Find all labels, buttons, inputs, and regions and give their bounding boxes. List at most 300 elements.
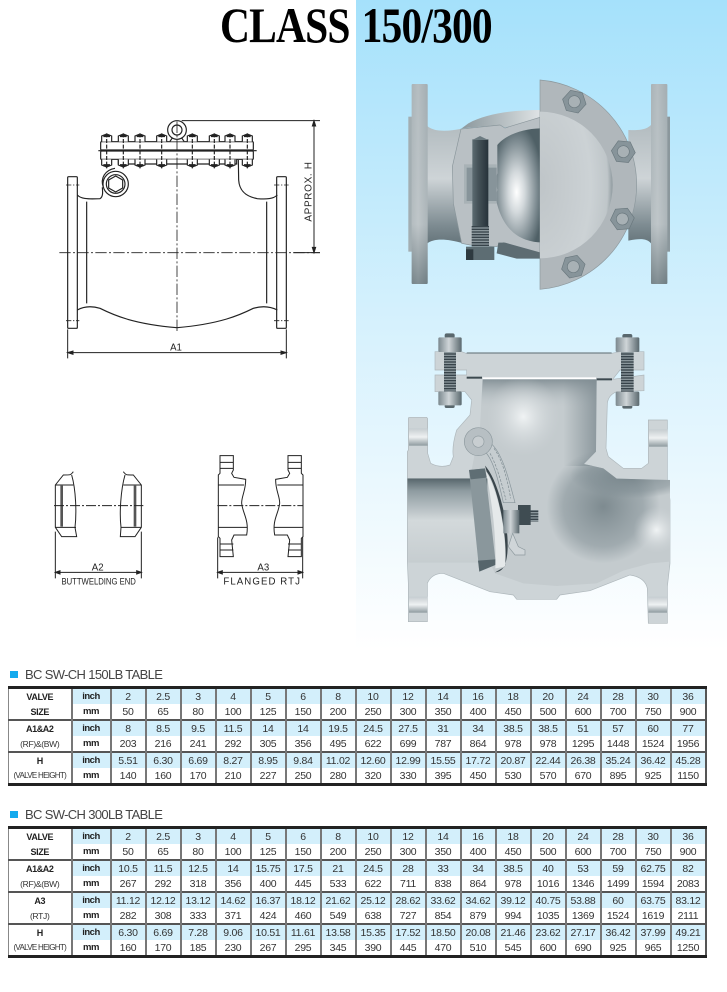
table: 300LB dimensions: 1250 bbox=[677, 942, 699, 954]
A3 dimension bbox=[218, 537, 303, 588]
table: 150LB dimensions: 26.38 bbox=[570, 754, 596, 766]
table: 300LB dimensions: 20 bbox=[542, 830, 554, 842]
table: 300LB dimensions: 345 bbox=[330, 942, 346, 954]
table: 300LB dimensions: 40.75 bbox=[535, 894, 561, 906]
table: 150LB dimensions: 9.84 bbox=[293, 754, 313, 766]
table: 150LB dimensions: 622 bbox=[365, 738, 381, 750]
table: 300LB dimensions: 36.42 bbox=[605, 926, 631, 938]
table: 150LB dimensions: 10 bbox=[367, 690, 379, 702]
illustration: valve end cutaway bbox=[408, 80, 670, 289]
table: 300LB dimensions: 2.5 bbox=[156, 830, 170, 842]
table: 300LB dimensions: 28 bbox=[402, 862, 414, 874]
table: 300LB dimensions: 63.75 bbox=[640, 894, 666, 906]
table: 300LB dimensions: 7.28 bbox=[188, 926, 208, 938]
table: 150LB dimensions: 24.5 bbox=[363, 722, 383, 734]
table: 300LB dimensions: 15.75 bbox=[255, 862, 281, 874]
table: 300LB dimensions: mm bbox=[83, 910, 99, 920]
table: 150LB dimensions: mm bbox=[83, 706, 99, 716]
table: 150LB dimensions: inch bbox=[82, 722, 100, 734]
icon: blue square bullet 150LB bbox=[10, 671, 18, 678]
table: 300LB dimensions: 200 bbox=[330, 846, 346, 858]
table: 150LB dimensions: 305 bbox=[260, 738, 276, 750]
table: 300LB dimensions: inch bbox=[82, 830, 100, 842]
table: 300LB dimensions: 12 bbox=[402, 830, 414, 842]
dimension: A1: A1 bbox=[170, 343, 182, 354]
table: 300LB dimensions: 82 bbox=[682, 862, 694, 874]
A2 dimension bbox=[55, 532, 141, 587]
table: 300LB dimensions: 30 bbox=[647, 830, 659, 842]
table: 300LB dimensions: 17.52 bbox=[395, 926, 421, 938]
table: 150LB dimensions: (VALVE HEIGHT) bbox=[13, 770, 66, 780]
table: 150LB dimensions: 11.5 bbox=[224, 722, 242, 734]
table: 150LB dimensions: 227 bbox=[260, 770, 276, 782]
table: 300LB dimensions: 170 bbox=[155, 942, 171, 954]
table: 150LB dimensions: 35.24 bbox=[605, 754, 631, 766]
table: 300LB dimensions: 400 bbox=[260, 878, 276, 890]
table: 300LB dimensions: SIZE bbox=[31, 846, 49, 856]
table: 300LB dimensions: 5 bbox=[265, 830, 271, 842]
table: 300LB dimensions: 40 bbox=[542, 862, 554, 874]
table: 150LB dimensions: 51 bbox=[577, 722, 589, 734]
table: 150LB dimensions: 216 bbox=[155, 738, 171, 750]
table: 150LB dimensions: 77 bbox=[682, 722, 694, 734]
table: 300LB dimensions: 854 bbox=[435, 910, 451, 922]
table: 300LB dimensions: 100 bbox=[225, 846, 241, 858]
table: 300LB dimensions: 6.69 bbox=[153, 926, 173, 938]
table: 300LB dimensions: 11.61 bbox=[291, 926, 315, 938]
table: 300LB dimensions: 50 bbox=[122, 846, 134, 858]
table: 300LB dimensions: 445 bbox=[295, 878, 311, 890]
table: 300LB dimensions: 1369 bbox=[572, 910, 594, 922]
table: 300LB dimensions: 53 bbox=[577, 862, 589, 874]
table: 150LB dimensions: 150 bbox=[295, 706, 311, 718]
table: 150LB dimensions: 9.5 bbox=[191, 722, 205, 734]
table: 300LB dimensions: 13.12 bbox=[185, 894, 211, 906]
table: 150LB dimensions: 3 bbox=[195, 690, 201, 702]
table: 150LB dimensions: 160 bbox=[155, 770, 171, 782]
table: 300LB dimensions: 11.5 bbox=[154, 862, 172, 874]
cut body section bbox=[452, 110, 540, 259]
table: 300LB dimensions: 62.75 bbox=[640, 862, 666, 874]
table: 150LB dimensions: 900 bbox=[680, 706, 696, 718]
table: 300LB dimensions: 16.37 bbox=[255, 894, 281, 906]
table: 150LB dimensions: 2.5 bbox=[156, 690, 170, 702]
table: 150LB dimensions: 6 bbox=[300, 690, 306, 702]
table: 150LB dimensions: 38.5 bbox=[538, 722, 558, 734]
gasket and cover lines bbox=[467, 352, 612, 380]
table: 300LB dimensions: (RF)&(BW) bbox=[20, 878, 59, 888]
table: 150LB dimensions bbox=[8, 686, 706, 786]
table: 300LB dimensions: 510 bbox=[470, 942, 486, 954]
table: 300LB dimensions: 36 bbox=[682, 830, 694, 842]
table: 150LB dimensions: 570 bbox=[540, 770, 556, 782]
table: 150LB dimensions: 699 bbox=[400, 738, 416, 750]
table: 300LB dimensions: 350 bbox=[435, 846, 451, 858]
table: 150LB dimensions: 18 bbox=[507, 690, 519, 702]
table: 150LB dimensions: 14 bbox=[437, 690, 449, 702]
cover bolts bbox=[98, 133, 257, 168]
A2 dimension: BUTTWELDING END bbox=[61, 577, 136, 587]
table: 150LB dimensions: 125 bbox=[260, 706, 276, 718]
table: 150LB dimensions: 65 bbox=[157, 706, 169, 718]
table: 300LB dimensions: 295 bbox=[295, 942, 311, 954]
table: 300LB dimensions: 14 bbox=[437, 830, 449, 842]
table: 150LB dimensions: 15.55 bbox=[430, 754, 456, 766]
table: 150LB dimensions: 28 bbox=[612, 690, 624, 702]
table: 300LB dimensions: 60 bbox=[612, 894, 624, 906]
disc seen edge on bbox=[464, 164, 497, 204]
table: 300LB dimensions: 1594 bbox=[642, 878, 664, 890]
flanges bbox=[408, 84, 670, 284]
A3 dimension: FLANGED RTJ bbox=[223, 577, 300, 588]
table: 300LB dimensions: 33.62 bbox=[430, 894, 456, 906]
table: 300LB dimensions: 16 bbox=[472, 830, 484, 842]
table: 150LB dimensions: 34 bbox=[472, 722, 484, 734]
table: 300LB dimensions: 8 bbox=[335, 830, 341, 842]
illustration: valve longitudinal section bbox=[407, 333, 697, 623]
table: 150LB dimensions: 8.5 bbox=[156, 722, 170, 734]
table: 150LB dimensions: 400 bbox=[470, 706, 486, 718]
table: 150LB dimensions: 8.95 bbox=[258, 754, 278, 766]
table: 150LB dimensions: 864 bbox=[470, 738, 486, 750]
table: 150LB dimensions: 356 bbox=[295, 738, 311, 750]
table: 300LB dimensions: 638 bbox=[365, 910, 381, 922]
table: 150LB dimensions: A1&A2 bbox=[26, 724, 54, 734]
table: 300LB dimensions: 1016 bbox=[537, 878, 559, 890]
table: 150LB dimensions: 750 bbox=[645, 706, 661, 718]
panel: blue gradient background bbox=[356, 0, 727, 650]
table: 300LB dimensions: 33 bbox=[437, 862, 449, 874]
table: 300LB dimensions: mm bbox=[83, 878, 99, 888]
table: 300LB dimensions: 12.12 bbox=[150, 894, 176, 906]
table: 300LB dimensions: 250 bbox=[365, 846, 381, 858]
table: 150LB dimensions: 6.30 bbox=[153, 754, 173, 766]
swing disc bbox=[469, 466, 508, 572]
table: 300LB dimensions: inch bbox=[82, 926, 100, 938]
table: 150LB dimensions: 17.72 bbox=[465, 754, 491, 766]
table: 300LB dimensions: 39.12 bbox=[500, 894, 526, 906]
table: 300LB dimensions: 80 bbox=[192, 846, 204, 858]
table: 300LB dimensions: 185 bbox=[190, 942, 206, 954]
body necks bbox=[427, 125, 651, 243]
table: 300LB dimensions: 424 bbox=[260, 910, 276, 922]
table: 300LB dimensions: 27.17 bbox=[570, 926, 596, 938]
table: 300LB dimensions: 445 bbox=[400, 942, 416, 954]
table: 300LB dimensions: 13.58 bbox=[325, 926, 351, 938]
table: 150LB dimensions: 31 bbox=[437, 722, 449, 734]
table: 150LB dimensions: 170 bbox=[190, 770, 206, 782]
table: 300LB dimensions: 12.5 bbox=[188, 862, 208, 874]
table: 300LB dimensions: 18.12 bbox=[290, 894, 316, 906]
table: 300LB dimensions: 83.12 bbox=[675, 894, 701, 906]
table: 150LB dimensions: 8.27 bbox=[223, 754, 243, 766]
table: 300LB dimensions: 1619 bbox=[642, 910, 664, 922]
table: 150LB dimensions: 1448 bbox=[607, 738, 629, 750]
table: 150LB dimensions: 200 bbox=[330, 706, 346, 718]
table: 300LB dimensions: 925 bbox=[610, 942, 626, 954]
table: 300LB dimensions: 292 bbox=[155, 878, 171, 890]
table: 300LB dimensions: mm bbox=[83, 846, 99, 856]
table: 150LB dimensions: 60 bbox=[647, 722, 659, 734]
table: 300LB dimensions: 1035 bbox=[537, 910, 559, 922]
table: 300LB dimensions: 21.46 bbox=[500, 926, 526, 938]
table: 300LB dimensions: 38.5 bbox=[503, 862, 523, 874]
table: 300LB dimensions: 10.51 bbox=[255, 926, 281, 938]
table: 150LB dimensions: 30 bbox=[647, 690, 659, 702]
table: 300LB dimensions: 371 bbox=[225, 910, 241, 922]
table: 300LB dimensions: 2 bbox=[125, 830, 131, 842]
table: 150LB dimensions: 895 bbox=[610, 770, 626, 782]
table: 150LB dimensions: 8 bbox=[335, 690, 341, 702]
table: 300LB dimensions: (VALVE HEIGHT) bbox=[13, 942, 66, 952]
table: 150LB dimensions: 320 bbox=[365, 770, 381, 782]
table: 150LB dimensions: inch bbox=[82, 754, 100, 766]
table: 150LB dimensions: mm bbox=[83, 770, 99, 780]
table: 150LB dimensions: 45.28 bbox=[675, 754, 701, 766]
table: 300LB dimensions: 28 bbox=[612, 830, 624, 842]
table: 150LB dimensions: (RF)&(BW) bbox=[20, 738, 59, 748]
long stud bolt bbox=[466, 136, 494, 260]
table: 300LB dimensions: A3 bbox=[34, 896, 45, 906]
hinge pin bbox=[464, 428, 492, 456]
table: 300LB dimensions: 34 bbox=[472, 862, 484, 874]
table: 300LB dimensions: 994 bbox=[505, 910, 521, 922]
A3 dimension: A3 bbox=[257, 562, 269, 573]
inner cavity bbox=[495, 128, 540, 242]
table: 150LB dimensions: 395 bbox=[435, 770, 451, 782]
table: 150LB dimensions: 2 bbox=[125, 690, 131, 702]
table: 150LB dimensions: 36 bbox=[682, 690, 694, 702]
table: 300LB dimensions: 20.08 bbox=[465, 926, 491, 938]
table: 150LB dimensions: 250 bbox=[365, 706, 381, 718]
table: 150LB dimensions: SIZE bbox=[31, 706, 49, 716]
table: 300LB dimensions: 160 bbox=[120, 942, 136, 954]
table: 150LB dimensions: 14 bbox=[262, 722, 274, 734]
right cover bolt bbox=[616, 334, 639, 409]
table: 300LB dimensions: 21 bbox=[332, 862, 344, 874]
table: 300LB dimensions: 600 bbox=[540, 942, 556, 954]
body section silhouette bbox=[407, 352, 670, 623]
table: 300LB dimensions: 978 bbox=[505, 878, 521, 890]
table: 150LB dimensions: 80 bbox=[192, 706, 204, 718]
swing arm bbox=[485, 443, 515, 503]
table: 300LB dimensions: 282 bbox=[120, 910, 136, 922]
table: 150LB dimensions: inch bbox=[82, 690, 100, 702]
table: 150LB dimensions: 292 bbox=[225, 738, 241, 750]
table: 150LB dimensions: 50 bbox=[122, 706, 134, 718]
table: 300LB dimensions: 14.62 bbox=[220, 894, 246, 906]
table: 300LB dimensions: 500 bbox=[540, 846, 556, 858]
table: 300LB dimensions: 356 bbox=[225, 878, 241, 890]
table: 300LB dimensions: 600 bbox=[575, 846, 591, 858]
table: 150LB dimensions: 5.51 bbox=[118, 754, 138, 766]
eye bolt bbox=[168, 121, 186, 141]
table: 150LB dimensions: 530 bbox=[505, 770, 521, 782]
table: 150LB dimensions: 38.5 bbox=[503, 722, 523, 734]
table: 300LB dimensions: 267 bbox=[260, 942, 276, 954]
table: 300LB dimensions: 11.12 bbox=[116, 894, 140, 906]
table: 300LB dimensions: 533 bbox=[330, 878, 346, 890]
table: 150LB dimensions: mm bbox=[83, 738, 99, 748]
table: 150LB dimensions: 330 bbox=[400, 770, 416, 782]
table: 300LB dimensions: 308 bbox=[155, 910, 171, 922]
dimension: A1 bbox=[68, 329, 286, 358]
dimension: approx H bbox=[182, 121, 320, 253]
table: 150LB dimensions: 450 bbox=[470, 770, 486, 782]
table: 150LB dimensions: 19.5 bbox=[328, 722, 348, 734]
drawing: main side elevation with dimensions bbox=[59, 121, 320, 358]
table: 300LB dimensions: 6 bbox=[300, 830, 306, 842]
table: 300LB dimensions: 470 bbox=[435, 942, 451, 954]
table: 300LB dimensions: 21.62 bbox=[325, 894, 351, 906]
table: 300LB dimensions: 1524 bbox=[607, 910, 629, 922]
table: 300LB dimensions: 37.99 bbox=[640, 926, 666, 938]
cap half disc bbox=[540, 80, 637, 289]
table: 150LB dimensions: 12.60 bbox=[360, 754, 386, 766]
left and right end flanges bbox=[68, 177, 286, 328]
table: 300LB dimensions: 727 bbox=[400, 910, 416, 922]
table: 300LB dimensions: 900 bbox=[680, 846, 696, 858]
table: 150LB dimensions: 500 bbox=[540, 706, 556, 718]
table: 300LB dimensions: 864 bbox=[470, 878, 486, 890]
table: 300LB dimensions: 10 bbox=[367, 830, 379, 842]
table: 150LB dimensions: 20.87 bbox=[500, 754, 526, 766]
drawing: end connection details bbox=[54, 456, 303, 588]
table: 150LB dimensions: 1524 bbox=[642, 738, 664, 750]
table: 300LB dimensions: 1346 bbox=[572, 878, 594, 890]
cover flange bbox=[101, 142, 253, 164]
table: 300LB dimensions: 10.5 bbox=[118, 862, 138, 874]
table: 150LB dimensions: 5 bbox=[265, 690, 271, 702]
table: 300LB dimensions: 711 bbox=[400, 878, 416, 890]
table: 150LB dimensions: 140 bbox=[120, 770, 136, 782]
table: 300LB dimensions: 9.06 bbox=[223, 926, 243, 938]
flange bolt hole shading bbox=[409, 428, 668, 613]
table: 150LB dimensions: 8 bbox=[125, 722, 131, 734]
table: 150LB dimensions: 280 bbox=[330, 770, 346, 782]
table: 300LB dimensions: 700 bbox=[610, 846, 626, 858]
table: 150LB dimensions: 350 bbox=[435, 706, 451, 718]
cap dome bbox=[540, 112, 613, 258]
table: 150LB dimensions: 300 bbox=[400, 706, 416, 718]
table: 150LB dimensions: 16 bbox=[472, 690, 484, 702]
table: 150LB dimensions: VALVE bbox=[26, 692, 53, 702]
table: 300LB dimensions: 2083 bbox=[677, 878, 699, 890]
table: 300LB dimensions: 1499 bbox=[607, 878, 629, 890]
table: 150LB dimensions: 203 bbox=[120, 738, 136, 750]
table: 150LB dimensions: H bbox=[37, 756, 43, 766]
table: 300LB dimensions: inch bbox=[82, 862, 100, 874]
table: 300LB dimensions: 53.88 bbox=[570, 894, 596, 906]
table: 300LB dimensions: 18 bbox=[507, 830, 519, 842]
table: 150LB dimensions: 241 bbox=[190, 738, 206, 750]
table: 150LB dimensions: 495 bbox=[330, 738, 346, 750]
table: 150LB dimensions: 24 bbox=[577, 690, 589, 702]
table: 150LB dimensions: 670 bbox=[575, 770, 591, 782]
heading: 300LB table: BC SW-CH 300LB TABLE bbox=[25, 807, 162, 822]
table: 150LB dimensions: 1295 bbox=[572, 738, 594, 750]
table: 300LB dimensions: A1&A2 bbox=[26, 864, 54, 874]
table: 300LB dimensions: 17.5 bbox=[293, 862, 313, 874]
icon: blue square bullet 300LB bbox=[10, 811, 18, 818]
table: 300LB dimensions: 18.50 bbox=[430, 926, 456, 938]
table: 300LB dimensions: 49.21 bbox=[675, 926, 701, 938]
dimension: approx H: APPROX. H bbox=[304, 162, 315, 222]
table: 300LB dimensions: 318 bbox=[190, 878, 206, 890]
table: 150LB dimensions: 700 bbox=[610, 706, 626, 718]
table: 150LB dimensions: 450 bbox=[505, 706, 521, 718]
table: 300LB dimensions: 879 bbox=[470, 910, 486, 922]
cavity shading bbox=[408, 380, 670, 560]
flanged RTJ sections bbox=[217, 456, 303, 557]
table: 150LB dimensions: 6.69 bbox=[188, 754, 208, 766]
table: 300LB dimensions: 300 bbox=[400, 846, 416, 858]
table: 300LB dimensions: 6.30 bbox=[118, 926, 138, 938]
table: 150LB dimensions: 12 bbox=[402, 690, 414, 702]
table: 300LB dimensions: 4 bbox=[230, 830, 236, 842]
table: 150LB dimensions: 1150 bbox=[677, 770, 699, 782]
table: 150LB dimensions: 36.42 bbox=[640, 754, 666, 766]
table: 300LB dimensions: H bbox=[37, 928, 43, 938]
table: 300LB dimensions: 34.62 bbox=[465, 894, 491, 906]
cap hex bolts bbox=[559, 89, 636, 279]
table: 300LB dimensions: 15.35 bbox=[360, 926, 386, 938]
table: 300LB dimensions: 333 bbox=[190, 910, 206, 922]
table: 300LB dimensions: 59 bbox=[612, 862, 624, 874]
table: 300LB dimensions: 230 bbox=[225, 942, 241, 954]
internal cavity bbox=[407, 379, 670, 586]
table: 300LB dimensions: (RTJ) bbox=[30, 910, 50, 920]
table: 150LB dimensions: 12.99 bbox=[395, 754, 421, 766]
table: 150LB dimensions: 210 bbox=[225, 770, 241, 782]
table: 300LB dimensions: 400 bbox=[470, 846, 486, 858]
table: 300LB dimensions: 390 bbox=[365, 942, 381, 954]
body outline bbox=[77, 160, 277, 328]
table: 150LB dimensions: 1956 bbox=[677, 738, 699, 750]
table: 300LB dimensions: 750 bbox=[645, 846, 661, 858]
table: 300LB dimensions: 2111 bbox=[678, 910, 698, 922]
table: 150LB dimensions: 57 bbox=[612, 722, 624, 734]
table: 300LB dimensions: 125 bbox=[260, 846, 276, 858]
table: 300LB dimensions: inch bbox=[82, 894, 100, 906]
buttwelding end sections bbox=[54, 472, 143, 537]
table: 150LB dimensions: 11.02 bbox=[326, 754, 350, 766]
table: 300LB dimensions: 460 bbox=[295, 910, 311, 922]
table: 150LB dimensions: 978 bbox=[505, 738, 521, 750]
left cover bolt bbox=[438, 333, 462, 408]
table: 150LB dimensions: 250 bbox=[295, 770, 311, 782]
table: 300LB dimensions: 690 bbox=[575, 942, 591, 954]
table: 150LB dimensions: 925 bbox=[645, 770, 661, 782]
table: 150LB dimensions: 22.44 bbox=[535, 754, 561, 766]
centre lines bbox=[59, 122, 320, 333]
table: 300LB dimensions: 838 bbox=[435, 878, 451, 890]
table: 150LB dimensions: 4 bbox=[230, 690, 236, 702]
A2 dimension: A2 bbox=[92, 562, 104, 573]
table: 300LB dimensions: 25.12 bbox=[360, 894, 386, 906]
table: 150LB dimensions: 100 bbox=[225, 706, 241, 718]
table: 300LB dimensions: 150 bbox=[295, 846, 311, 858]
table: 300LB dimensions: 65 bbox=[157, 846, 169, 858]
table: 300LB dimensions: mm bbox=[83, 942, 99, 952]
table: 300LB dimensions: 549 bbox=[330, 910, 346, 922]
hinge plug bbox=[103, 171, 128, 197]
table: 300LB dimensions: VALVE bbox=[26, 832, 53, 842]
table: 300LB dimensions: 965 bbox=[645, 942, 661, 954]
table: 300LB dimensions: 14 bbox=[227, 862, 239, 874]
table: 150LB dimensions: 14 bbox=[297, 722, 309, 734]
table: 300LB dimensions: 28.62 bbox=[395, 894, 421, 906]
